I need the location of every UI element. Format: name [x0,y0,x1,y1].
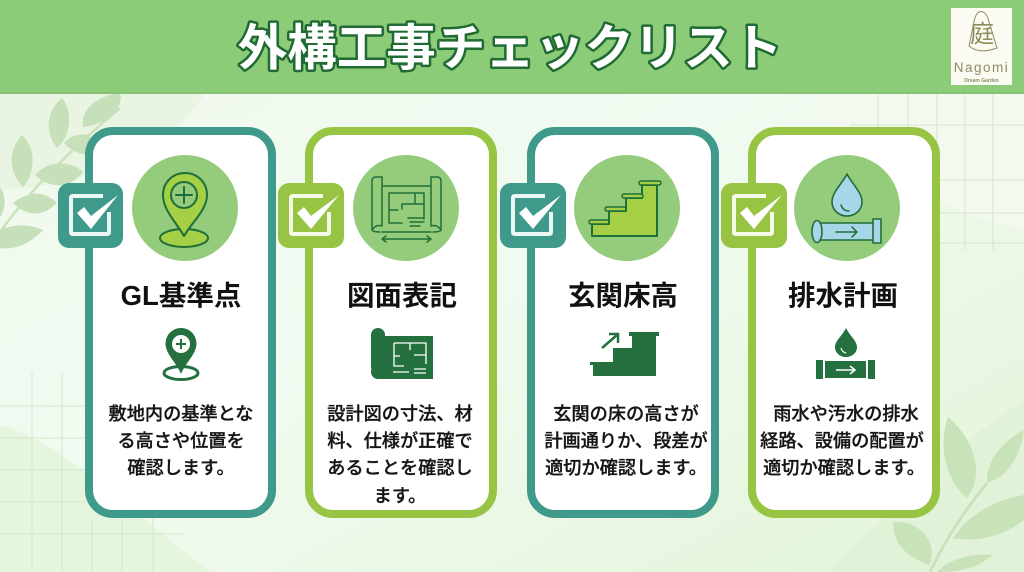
description: 経路、設備の配置が [760,430,924,451]
description: 計画通りか、段差が [544,430,708,451]
icon circle: stairs [574,155,680,261]
description: 設計図の寸法、材 [327,404,473,424]
icon: small blueprint [371,328,433,379]
description: る高さや位置を [117,431,245,451]
description [327,404,473,506]
description: 適切か確認します。 [545,458,707,478]
icon circle: map pin [132,155,238,261]
logo [951,8,1012,85]
description [760,404,925,478]
description: 敷地内の基準とな [109,404,253,424]
check badge [500,183,566,248]
icon circle: blueprint [353,155,459,261]
decorative leaves: top left [0,93,121,248]
icon circle: water drop and pipe [794,155,900,261]
check badge [721,183,787,248]
heading: 玄関床高 [568,280,678,311]
card frame [752,131,936,514]
check badge [58,183,123,248]
description: 料、仕様が正確で [327,430,473,451]
panel: 玄関床高 [531,131,715,514]
description: ます。 [374,486,426,506]
panel: GL基準点 [89,131,272,514]
logo: 庭 [970,14,994,49]
heading: 図面表記 [347,280,457,311]
description: 確認します。 [127,458,235,478]
icon: small stairs [590,332,659,376]
description [109,404,253,478]
card frame [531,131,715,514]
description: 玄関の床の高さが [553,403,699,424]
logo: Dream Garden [964,78,999,84]
description: 適切か確認します。 [763,458,925,478]
heading: 排水計画 [788,280,898,311]
card frame [89,131,272,514]
icon: small drop and pipe [816,328,875,379]
icon: small pin [164,328,198,380]
description [544,403,708,478]
panel: 図面表記 [309,131,493,514]
heading: GL基準点 [121,280,241,311]
description: あることを確認し [327,458,473,478]
panel: 排水計画 [752,131,936,514]
decorative leaves: bottom right [893,417,1024,572]
title: 外構工事チェックリスト [238,21,782,76]
check badge [278,183,344,248]
header band [0,0,1024,94]
card frame [309,131,493,514]
description: 雨水や汚水の排水 [773,404,919,424]
logo: Nagomi [954,60,1009,75]
